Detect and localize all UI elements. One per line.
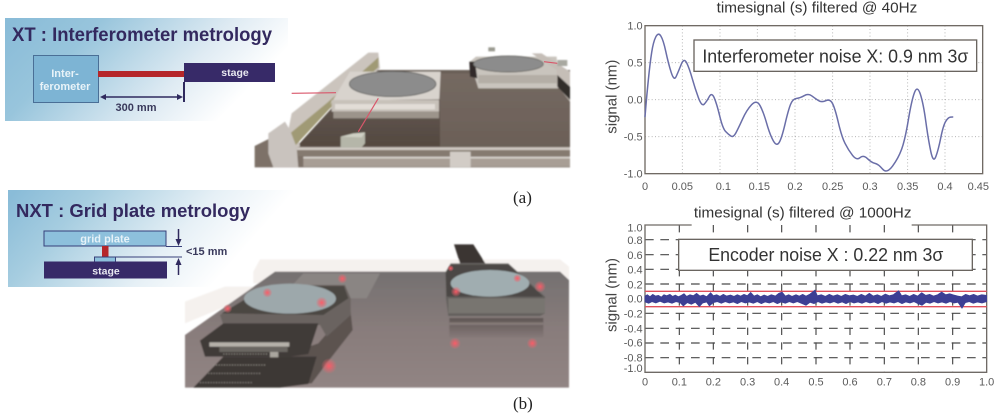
- label: (a): (a): [513, 188, 532, 207]
- x axis labels: [642, 181, 989, 193]
- y axis labels: -1.0: [624, 363, 643, 375]
- x axis labels: 0.6: [842, 376, 858, 388]
- y axis labels: 0.8: [627, 235, 643, 247]
- illustration: NXT stage render: [185, 244, 569, 388]
- panel: NXT grid plate diagram: [8, 190, 293, 287]
- y axis labels: 0.0: [627, 294, 643, 306]
- heading: NXT: NXT : Grid plate metrology: [16, 200, 251, 221]
- x axis labels: 0: [642, 181, 648, 193]
- chart title: timesignal (s) filtered @ 1000Hz: [694, 205, 911, 221]
- x axis labels: 0.4: [774, 376, 789, 388]
- y axis labels: -0.5: [624, 132, 643, 144]
- y axis labels: -1.0: [624, 169, 643, 181]
- laser beams: [292, 62, 557, 132]
- heading: XT: XT : Interferometer metrology: [12, 25, 272, 46]
- y axis labels: 1.0: [627, 21, 643, 33]
- y axis labels: -0.6: [624, 338, 643, 350]
- stage block: stage: [221, 67, 249, 79]
- callout: interferometer noise: Interferometer noise X: 0.9 nm 3σ: [702, 46, 969, 67]
- laser beam: [98, 71, 185, 77]
- chart title: timesignal (s) filtered @ 40Hz: [717, 1, 917, 17]
- panel: XT interferometer diagram: [5, 18, 288, 121]
- x axis labels: 0.9: [945, 376, 960, 388]
- dimension: 300 mm: 300 mm: [116, 102, 157, 114]
- y axis title: signal (nm): [604, 60, 621, 134]
- x axis labels: 0.1: [672, 376, 687, 388]
- callout: encoder noise: Encoder noise X : 0.22 nm 3σ: [708, 244, 944, 265]
- label: (b): (b): [513, 394, 533, 413]
- x axis labels: 0.45: [968, 181, 989, 193]
- x axis labels: 0.25: [822, 181, 843, 193]
- y axis labels: 0.5: [627, 58, 643, 70]
- x axis labels: 0.2: [706, 376, 721, 388]
- y axis labels: 0.2: [627, 279, 643, 291]
- chart: encoder noise line chart: [604, 205, 994, 388]
- x axis labels: 0.8: [911, 376, 926, 388]
- x axis labels: 0: [642, 376, 648, 388]
- y axis labels: [624, 223, 643, 375]
- y axis labels: 0.0: [627, 95, 643, 107]
- illustration: XT stage render: [255, 47, 570, 167]
- y axis labels: [624, 21, 643, 181]
- dimension: 300 mm: [100, 82, 185, 114]
- x axis labels: 0.3: [740, 376, 755, 388]
- chart: interferometer noise line chart: [604, 1, 989, 193]
- stage block: stage: [92, 266, 120, 278]
- x axis labels: 0.5: [808, 376, 824, 388]
- y axis title: signal (nm): [604, 258, 621, 332]
- stage block: [184, 63, 275, 82]
- encoder beam: [102, 246, 108, 257]
- sensor block: [94, 257, 116, 262]
- x axis labels: 0.2: [787, 181, 803, 193]
- noise signal: [645, 290, 987, 308]
- y axis labels: 0.6: [627, 250, 643, 262]
- y axis labels: 1.0: [627, 223, 643, 235]
- x axis labels: [642, 376, 994, 388]
- x axis labels: 0.15: [749, 181, 770, 193]
- y axis labels: -0.4: [624, 323, 643, 335]
- grid plate block: [44, 231, 166, 246]
- dimension: less than 15 mm: [116, 229, 227, 275]
- interferometer box: [34, 56, 98, 102]
- red sensor glows: [223, 265, 546, 374]
- y axis labels: 0.4: [627, 264, 643, 276]
- plot frame: [645, 26, 983, 174]
- dimension: less than 15 mm: <15 mm: [186, 246, 227, 258]
- grid plate block: grid plate: [80, 234, 130, 246]
- x axis labels: 0.3: [862, 181, 878, 193]
- plot frame: [645, 225, 987, 372]
- callout: encoder noise: [679, 239, 972, 270]
- y axis labels: -0.8: [624, 353, 643, 365]
- x axis labels: 0.4: [937, 181, 953, 193]
- x axis labels: 0.05: [672, 181, 693, 193]
- y axis labels: -0.2: [624, 308, 643, 320]
- x axis labels: 1.0: [979, 376, 994, 388]
- stage block: [44, 262, 167, 278]
- x axis labels: 0.35: [897, 181, 918, 193]
- plus/minus limit lines: [645, 291, 987, 307]
- signal line: [645, 34, 953, 171]
- interferometer box: ferometer: [40, 81, 91, 93]
- x axis labels: 0.7: [877, 376, 892, 388]
- interferometer box: Inter-: [51, 68, 79, 80]
- x axis labels: 0.1: [716, 181, 731, 193]
- callout: interferometer noise: [694, 40, 977, 71]
